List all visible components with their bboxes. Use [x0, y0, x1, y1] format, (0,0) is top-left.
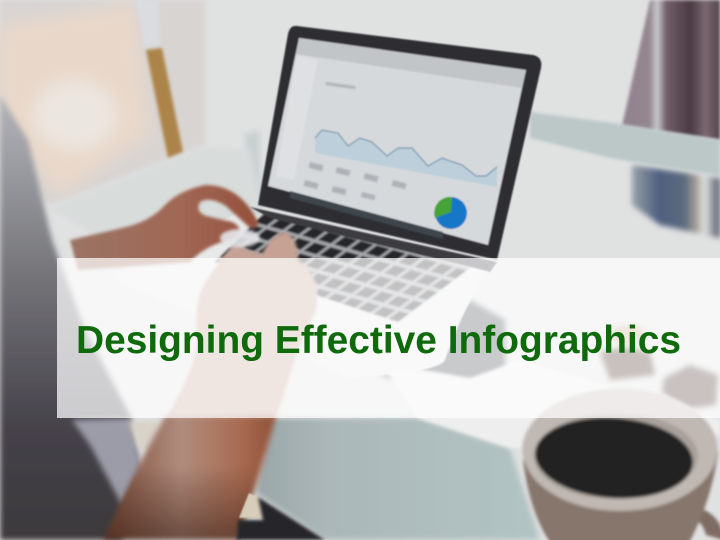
teal glass table — [256, 418, 540, 540]
shirt — [0, 95, 140, 540]
pie chart — [435, 197, 467, 229]
small stats text blocks — [304, 82, 407, 200]
laptop lid — [258, 26, 541, 260]
star cookies — [600, 325, 718, 410]
cup handle — [685, 505, 720, 540]
line chart — [315, 130, 497, 187]
shirt light fold — [72, 418, 142, 505]
desk paper — [245, 130, 260, 210]
translucent title band — [57, 258, 720, 418]
cylinder under shelf — [632, 165, 720, 238]
laptop — [116, 26, 541, 378]
forearm — [103, 416, 276, 540]
glass shelf — [530, 112, 720, 176]
white paper — [380, 360, 720, 448]
dark chair — [236, 497, 325, 540]
tan sliver behind arm — [239, 493, 263, 518]
right curtain — [622, 0, 720, 140]
laptop base — [116, 212, 497, 378]
keyboard — [215, 212, 470, 322]
title: Designing Effective Infographics — [76, 319, 681, 362]
left window blind — [0, 0, 205, 205]
shadow under laptop — [380, 300, 505, 384]
beige floor patch — [128, 421, 160, 450]
laptop screen — [268, 38, 526, 245]
hand on keyboard — [70, 185, 258, 270]
second hand and fingers — [165, 229, 317, 420]
dock — [290, 191, 443, 239]
coffee cup — [522, 388, 720, 540]
